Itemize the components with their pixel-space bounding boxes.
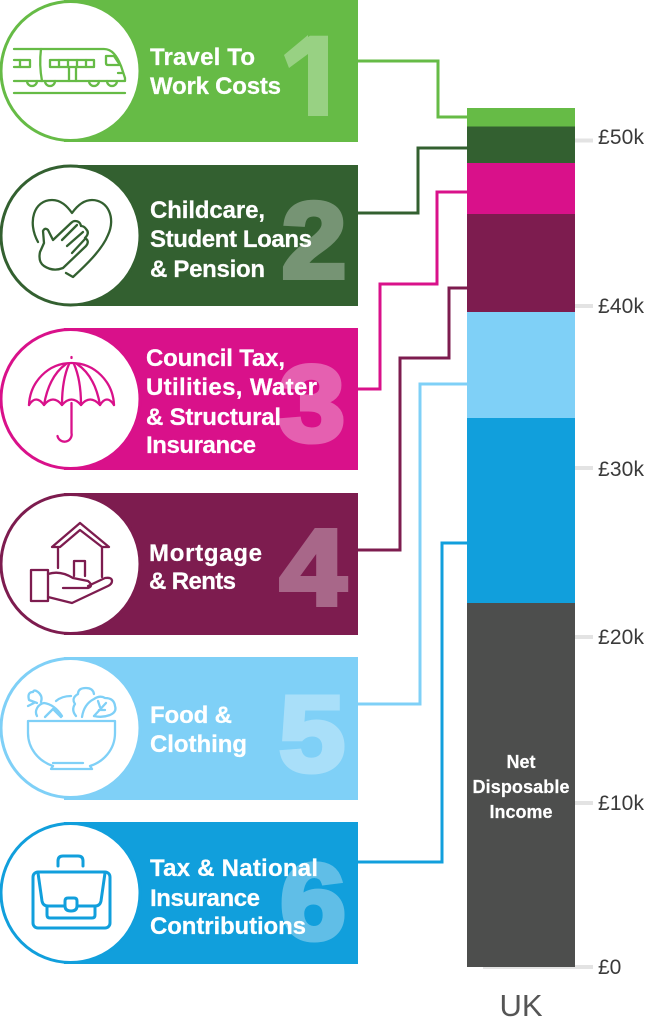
panel: council tax and utilities — [1, 328, 358, 470]
heading: travel to work costs: Travel To — [150, 44, 255, 71]
heading: travel to work costs: Work Costs — [150, 73, 281, 100]
connector: council tax to bar — [358, 192, 467, 389]
heading: food: Clothing — [150, 731, 247, 758]
axis labels: £0 — [598, 956, 621, 979]
bar label: net disposable income: Income — [489, 802, 553, 822]
panel: food and clothing — [1, 657, 358, 800]
heading: council tax: Council Tax, — [146, 345, 285, 372]
bar label: net disposable income: Disposable — [472, 777, 570, 797]
icon: train — [14, 49, 125, 93]
icon: briefcase — [33, 856, 110, 928]
stacked bar — [467, 108, 575, 967]
icon: hand on heart — [33, 200, 111, 277]
number 1: 1 — [285, 16, 345, 136]
axis labels: £50k — [598, 126, 644, 149]
number 4: 4 — [280, 507, 346, 628]
connector: mortgage to bar — [358, 288, 467, 550]
heading: mortgage — [149, 507, 346, 628]
heading: tax — [150, 842, 346, 963]
connector: food to bar — [358, 384, 467, 704]
heading: childcare: Student Loans — [150, 226, 312, 253]
bar label: net disposable income: Net — [506, 752, 536, 772]
heading: childcare — [150, 179, 346, 301]
number 1 — [284, 35, 328, 116]
icon: house on hand — [31, 523, 112, 603]
connector: tax to bar — [358, 543, 467, 862]
heading: mortgage: & Rents — [149, 568, 236, 595]
heading: council tax: Insurance — [146, 432, 256, 459]
heading: food — [150, 674, 345, 795]
axis labels: £20k — [598, 626, 644, 649]
panel: childcare, student loans and pension — [1, 165, 358, 306]
heading: travel to work costs — [150, 35, 328, 116]
heading: council tax — [146, 344, 345, 465]
heading: tax: Insurance — [150, 885, 260, 912]
heading: tax: Contributions — [150, 913, 306, 940]
axis ticks — [483, 138, 593, 969]
number 5: 5 — [279, 674, 345, 795]
heading: council tax: Utilities, Water — [146, 374, 317, 401]
category label: UK: UK — [499, 988, 543, 1023]
number 6: 6 — [280, 842, 346, 963]
icon: umbrella — [29, 357, 114, 442]
heading: childcare: Childcare, — [150, 197, 265, 224]
icon: salad bowl — [28, 688, 115, 769]
axis labels: £30k — [598, 458, 644, 481]
panel: tax and national insurance — [1, 822, 358, 964]
connector: childcare to bar — [358, 148, 467, 213]
heading: tax: Tax & National — [150, 855, 318, 882]
number 2: 2 — [282, 179, 346, 301]
axis labels: £40k — [598, 295, 644, 318]
number 3: 3 — [279, 344, 345, 465]
bar label: net disposable income — [472, 752, 570, 822]
panel: mortgage and rents — [1, 493, 358, 635]
heading: mortgage: Mortgage — [149, 540, 262, 567]
panel: travel to work costs — [1, 0, 358, 142]
heading: childcare: & Pension — [150, 256, 265, 283]
heading: food: Food & — [150, 702, 232, 729]
heading: council tax: & Structural — [146, 404, 281, 431]
axis labels — [598, 126, 644, 979]
connector: travel to bar — [358, 61, 467, 117]
axis labels: £10k — [598, 792, 644, 815]
